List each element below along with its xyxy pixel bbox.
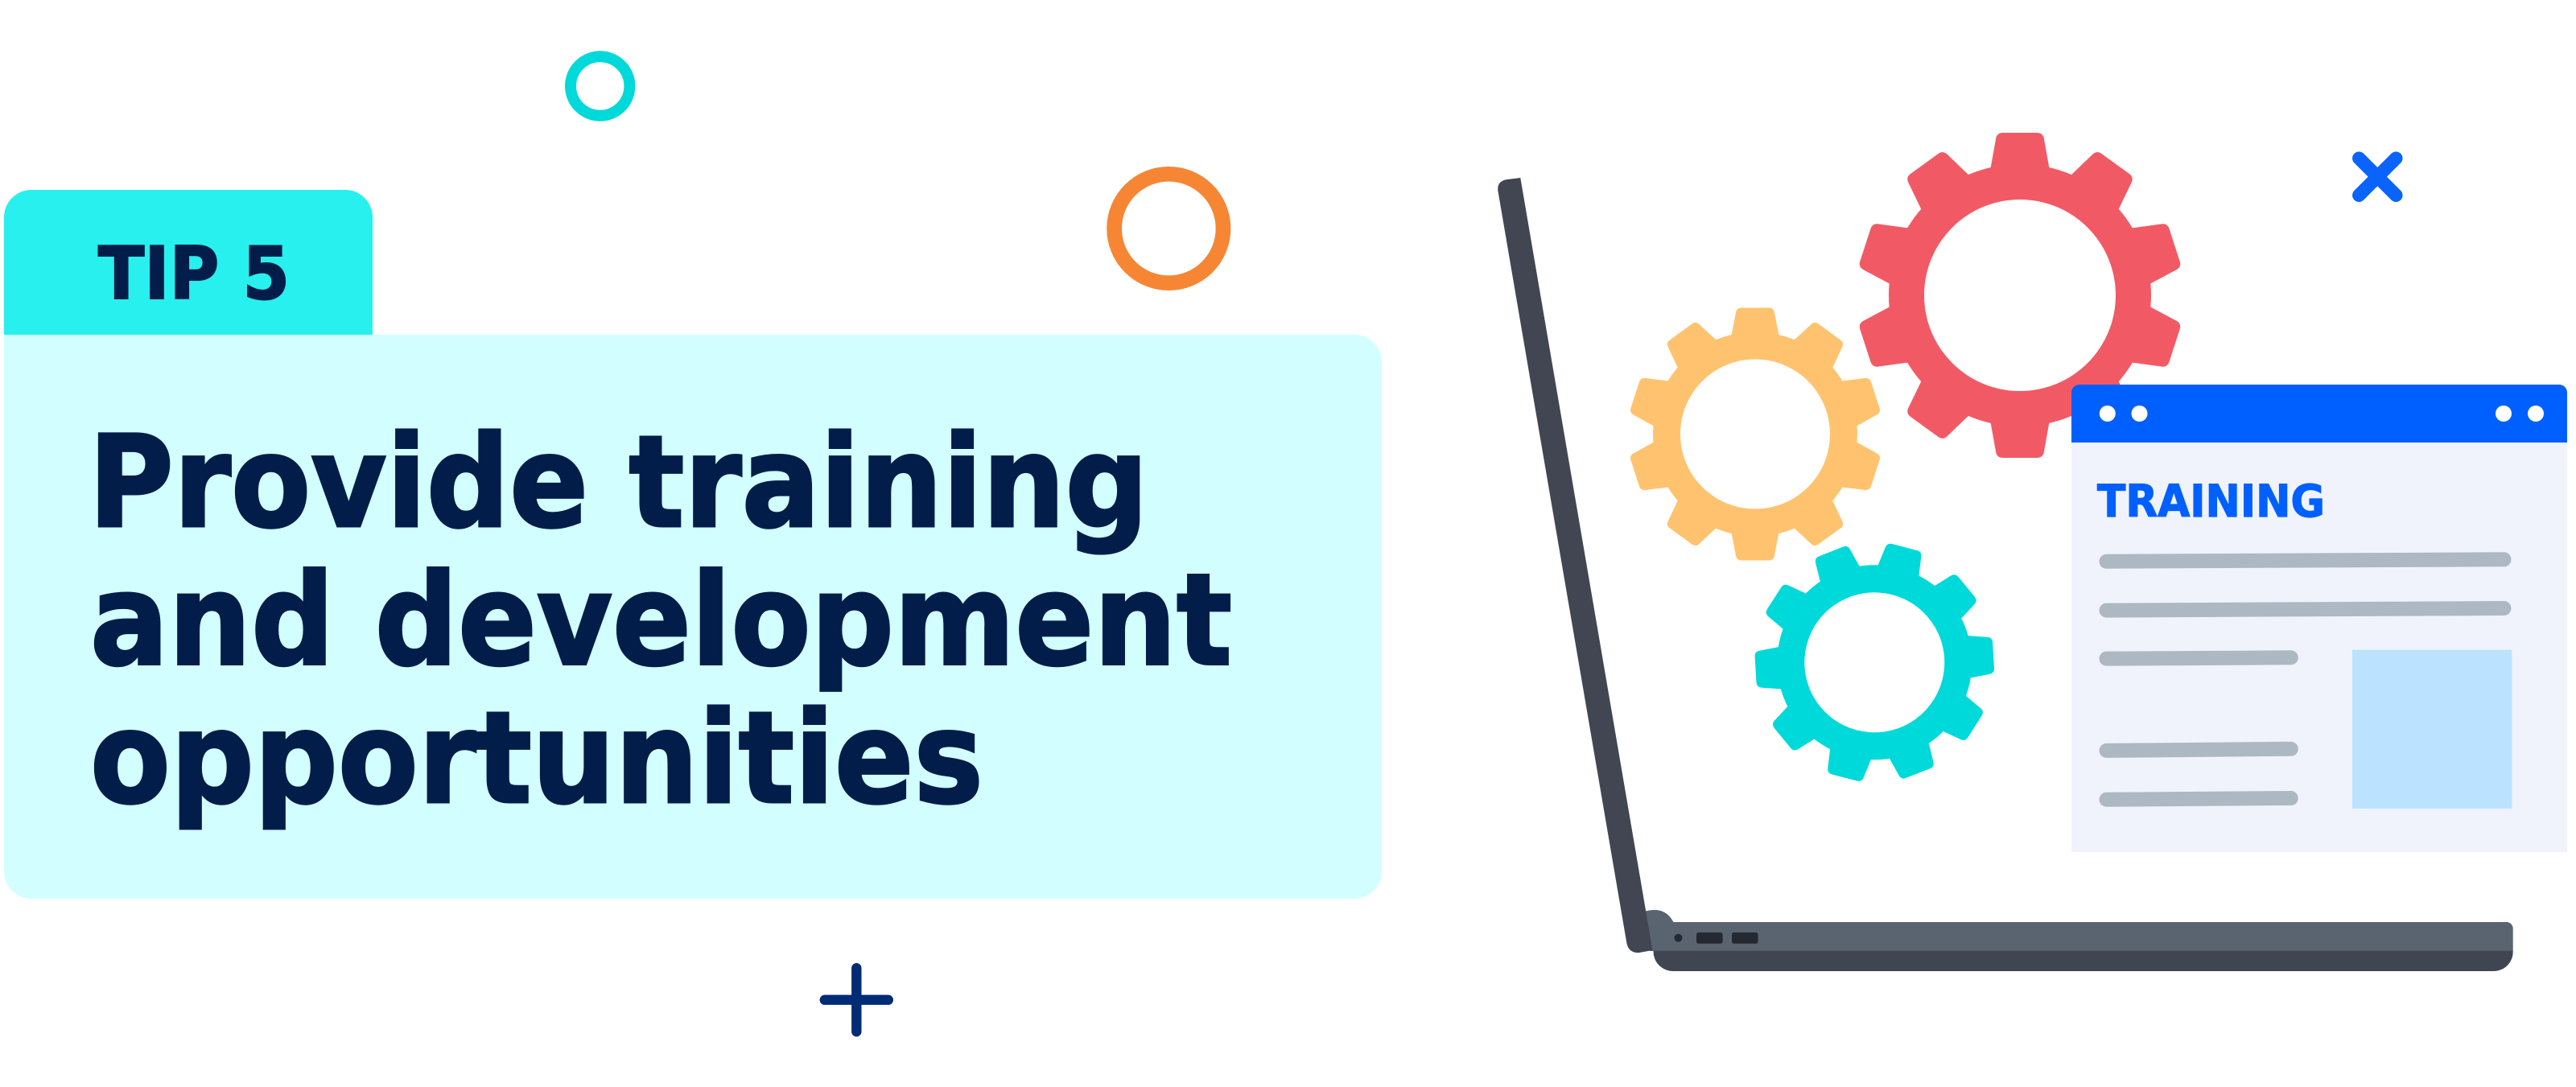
decorative orange ring bbox=[1115, 174, 1223, 283]
decorative teal ring bbox=[571, 56, 629, 116]
panel background bbox=[4, 335, 1382, 899]
icon: large red gear bbox=[1856, 133, 2184, 458]
panel: training browser window bbox=[2071, 385, 2567, 852]
heading: and development bbox=[90, 547, 1232, 695]
tip label: TIP 5 bbox=[98, 232, 290, 316]
tab: tip label background bbox=[4, 190, 373, 335]
decorative blue cross bbox=[2359, 159, 2396, 196]
placeholder image bbox=[2352, 650, 2512, 809]
window title bar bbox=[2071, 385, 2567, 443]
illustration: laptop bbox=[1498, 178, 2513, 971]
window heading: TRAINING bbox=[2097, 476, 2325, 527]
window body bbox=[2071, 443, 2567, 852]
heading bbox=[89, 409, 1232, 833]
laptop ports bbox=[1674, 933, 1758, 944]
window control dots bbox=[2100, 406, 2544, 422]
laptop lid bbox=[1498, 178, 1653, 953]
decorative navy plus bbox=[825, 968, 888, 1031]
heading: Provide training bbox=[89, 409, 1148, 557]
icon: teal gear bbox=[1729, 517, 2021, 808]
placeholder text lines bbox=[2107, 559, 2504, 800]
heading: opportunities bbox=[90, 685, 983, 833]
panel: tip heading card bbox=[4, 190, 1382, 899]
laptop base bbox=[1653, 951, 2513, 971]
laptop hinge bbox=[1642, 910, 1690, 951]
icon: orange gear bbox=[1627, 307, 1883, 560]
laptop keyboard deck bbox=[1650, 922, 2513, 951]
